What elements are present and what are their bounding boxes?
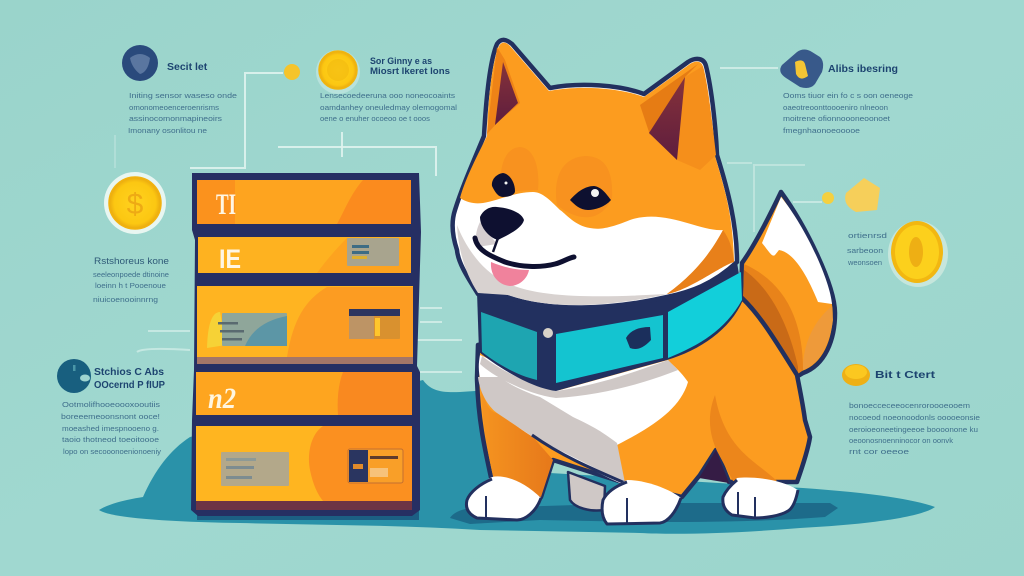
face shadow bbox=[457, 225, 667, 305]
text lines: moitrene ofionnoooneoonoet bbox=[783, 114, 891, 123]
panel 1 bbox=[197, 180, 411, 224]
left eye bbox=[492, 173, 515, 197]
block: Stchios bbox=[57, 359, 165, 456]
heading line 2: OOcernd P fIUP bbox=[94, 380, 165, 391]
front left leg bbox=[481, 385, 553, 497]
icon: small coin bbox=[822, 192, 834, 204]
icon: shield badge bbox=[780, 50, 823, 88]
panel 3 right card bbox=[349, 309, 400, 339]
text lines: Ooms tiuor ein fo c s oon oeneoge bbox=[783, 91, 913, 100]
heading: Sor Ginny e as bbox=[370, 56, 432, 67]
panel 4 label: n2 bbox=[208, 382, 236, 415]
muzzle shadow bbox=[476, 222, 497, 247]
heading line 2: Miosrt lkeret lons bbox=[370, 66, 450, 77]
block: Secit let bbox=[122, 45, 237, 135]
text lines: sarbeoon bbox=[847, 246, 883, 255]
icon: small coin bbox=[284, 64, 300, 80]
text lines: oeroioeoneetingeeoe boooonone ku bbox=[849, 425, 978, 434]
text lines: niuicoenooinnrng bbox=[93, 295, 158, 304]
text lines bbox=[93, 270, 169, 304]
chest shadow bbox=[478, 377, 625, 483]
inner paw bbox=[568, 472, 605, 511]
muzzle line bbox=[493, 238, 498, 252]
text lines: bonoecceceeocenroroooeooem bbox=[849, 401, 970, 410]
panel 2 bbox=[198, 237, 411, 273]
text lines: assinocomonmapineoirs bbox=[129, 114, 222, 123]
panel 3 left card bbox=[207, 312, 287, 348]
body bbox=[477, 298, 810, 497]
left inner ear bbox=[495, 62, 518, 125]
paw left bbox=[466, 476, 541, 520]
text lines: oaeotreoonttoooeniro nlneoon bbox=[783, 103, 888, 112]
text lines bbox=[320, 91, 457, 123]
collar slot bbox=[626, 327, 651, 349]
connector lines bbox=[115, 68, 822, 372]
panel 5 left card bbox=[221, 452, 289, 486]
text lines: Ootmolifhooeoooxooutiis bbox=[62, 400, 160, 409]
text lines bbox=[783, 91, 913, 135]
text lines: Imonany osonlitou ne bbox=[128, 126, 207, 135]
text lines: moeashed imespnooeno g. bbox=[62, 424, 159, 433]
icon: large coin bbox=[316, 50, 360, 94]
panel 4 bbox=[196, 372, 412, 415]
text lines: boreeemeoonsnont ooce! bbox=[61, 412, 160, 421]
right ear side bbox=[677, 66, 716, 170]
orange mask bbox=[460, 43, 734, 294]
text lines: lopo on secooonoenionoeniy bbox=[63, 447, 161, 456]
panel 2 card bbox=[347, 238, 399, 266]
panel 1 label: TI bbox=[216, 188, 236, 221]
stack frame bbox=[191, 173, 421, 516]
head silhouette bbox=[453, 40, 737, 308]
cheek marks bbox=[500, 147, 612, 217]
stack shadow bbox=[197, 508, 419, 520]
hind leg shade bbox=[710, 395, 777, 481]
tongue bbox=[491, 262, 529, 286]
paw right bbox=[723, 478, 798, 518]
text lines: oeoonosnoenninocor on oonvk bbox=[849, 436, 953, 445]
icon: gold shard bbox=[845, 178, 880, 212]
block: Microsoft tokens bbox=[284, 50, 457, 123]
collar bbox=[477, 262, 743, 391]
icon: flat coin bbox=[842, 364, 870, 386]
icon: dollar coin: $ bbox=[127, 188, 144, 221]
text lines: taoio thotneod toeoitoooe bbox=[62, 435, 159, 444]
right inner ear bbox=[649, 77, 685, 160]
eye glints bbox=[504, 182, 599, 197]
block: Bit Ctert bbox=[842, 364, 980, 456]
text lines bbox=[847, 231, 887, 267]
text lines: rnt cor oeeoe bbox=[849, 447, 909, 456]
icon: teal medallion bbox=[57, 359, 91, 393]
text lines: nocoeod noeonoodonls ooooeonsie bbox=[849, 413, 980, 422]
server stack bbox=[191, 173, 421, 520]
nose bbox=[480, 207, 524, 240]
text lines: ortienrsd bbox=[848, 231, 887, 240]
text lines bbox=[128, 91, 237, 135]
text lines: fmegnhaonoeooooe bbox=[783, 126, 860, 135]
text lines bbox=[849, 401, 980, 456]
shiba dog bbox=[450, 40, 838, 525]
right jaw shade bbox=[667, 230, 734, 294]
text lines: seeleonpoede dtinoine bbox=[93, 270, 169, 279]
text lines: loeinn h t Pooenoue bbox=[95, 281, 166, 290]
ground shadow under dog bbox=[450, 503, 838, 524]
right eye bbox=[570, 186, 611, 210]
panel 3 bbox=[197, 286, 413, 357]
text lines: omonomeoenceroenrisms bbox=[129, 103, 219, 112]
text lines: oamdanhey oneuledmay olemogomal bbox=[320, 103, 457, 112]
text lines: weonsoen bbox=[847, 258, 882, 267]
block: top right bbox=[780, 50, 913, 135]
collar shadow on chest bbox=[480, 356, 678, 398]
paw middle bbox=[602, 480, 681, 525]
collar left segment bbox=[481, 312, 537, 380]
block: right middle bbox=[822, 178, 948, 287]
collar right segment bbox=[668, 272, 742, 358]
icon glyph bbox=[130, 54, 150, 74]
tail bbox=[741, 192, 835, 376]
chest bbox=[479, 355, 688, 484]
text lines: Initing sensor waseso onde bbox=[129, 91, 237, 100]
panel 5 bbox=[196, 426, 412, 501]
ground shadow bbox=[99, 380, 935, 534]
heading: Alibs ibesring bbox=[828, 64, 898, 75]
heading: Bit t Ctert bbox=[875, 369, 936, 381]
heading: Stchios C Abs bbox=[94, 366, 164, 378]
heading: Rstshoreus kone bbox=[94, 256, 169, 266]
neck fold bbox=[532, 435, 625, 483]
left ear shade bbox=[487, 47, 520, 134]
panel 5 base strip bbox=[196, 501, 412, 510]
heading: Secit let bbox=[167, 61, 208, 73]
panel 3 base strip bbox=[197, 357, 413, 364]
block: reference coin bbox=[93, 172, 169, 304]
text lines bbox=[61, 400, 161, 456]
head bbox=[453, 40, 737, 308]
text lines: oene o enuher ocoeoo oe t ooos bbox=[320, 114, 430, 123]
panel 5 right card bbox=[348, 449, 403, 483]
collar stud bbox=[543, 328, 553, 338]
text lines: Lensecoedeeruna ooo noneocoaints bbox=[320, 91, 455, 100]
mouth bbox=[475, 238, 574, 266]
icon: navy medallion bbox=[122, 45, 158, 81]
collar middle segment bbox=[556, 315, 663, 383]
icon: tilted coin bbox=[888, 221, 948, 287]
panel 2 label: IE bbox=[219, 244, 241, 274]
right ear shade bbox=[640, 64, 698, 135]
belly gap bbox=[699, 450, 729, 483]
